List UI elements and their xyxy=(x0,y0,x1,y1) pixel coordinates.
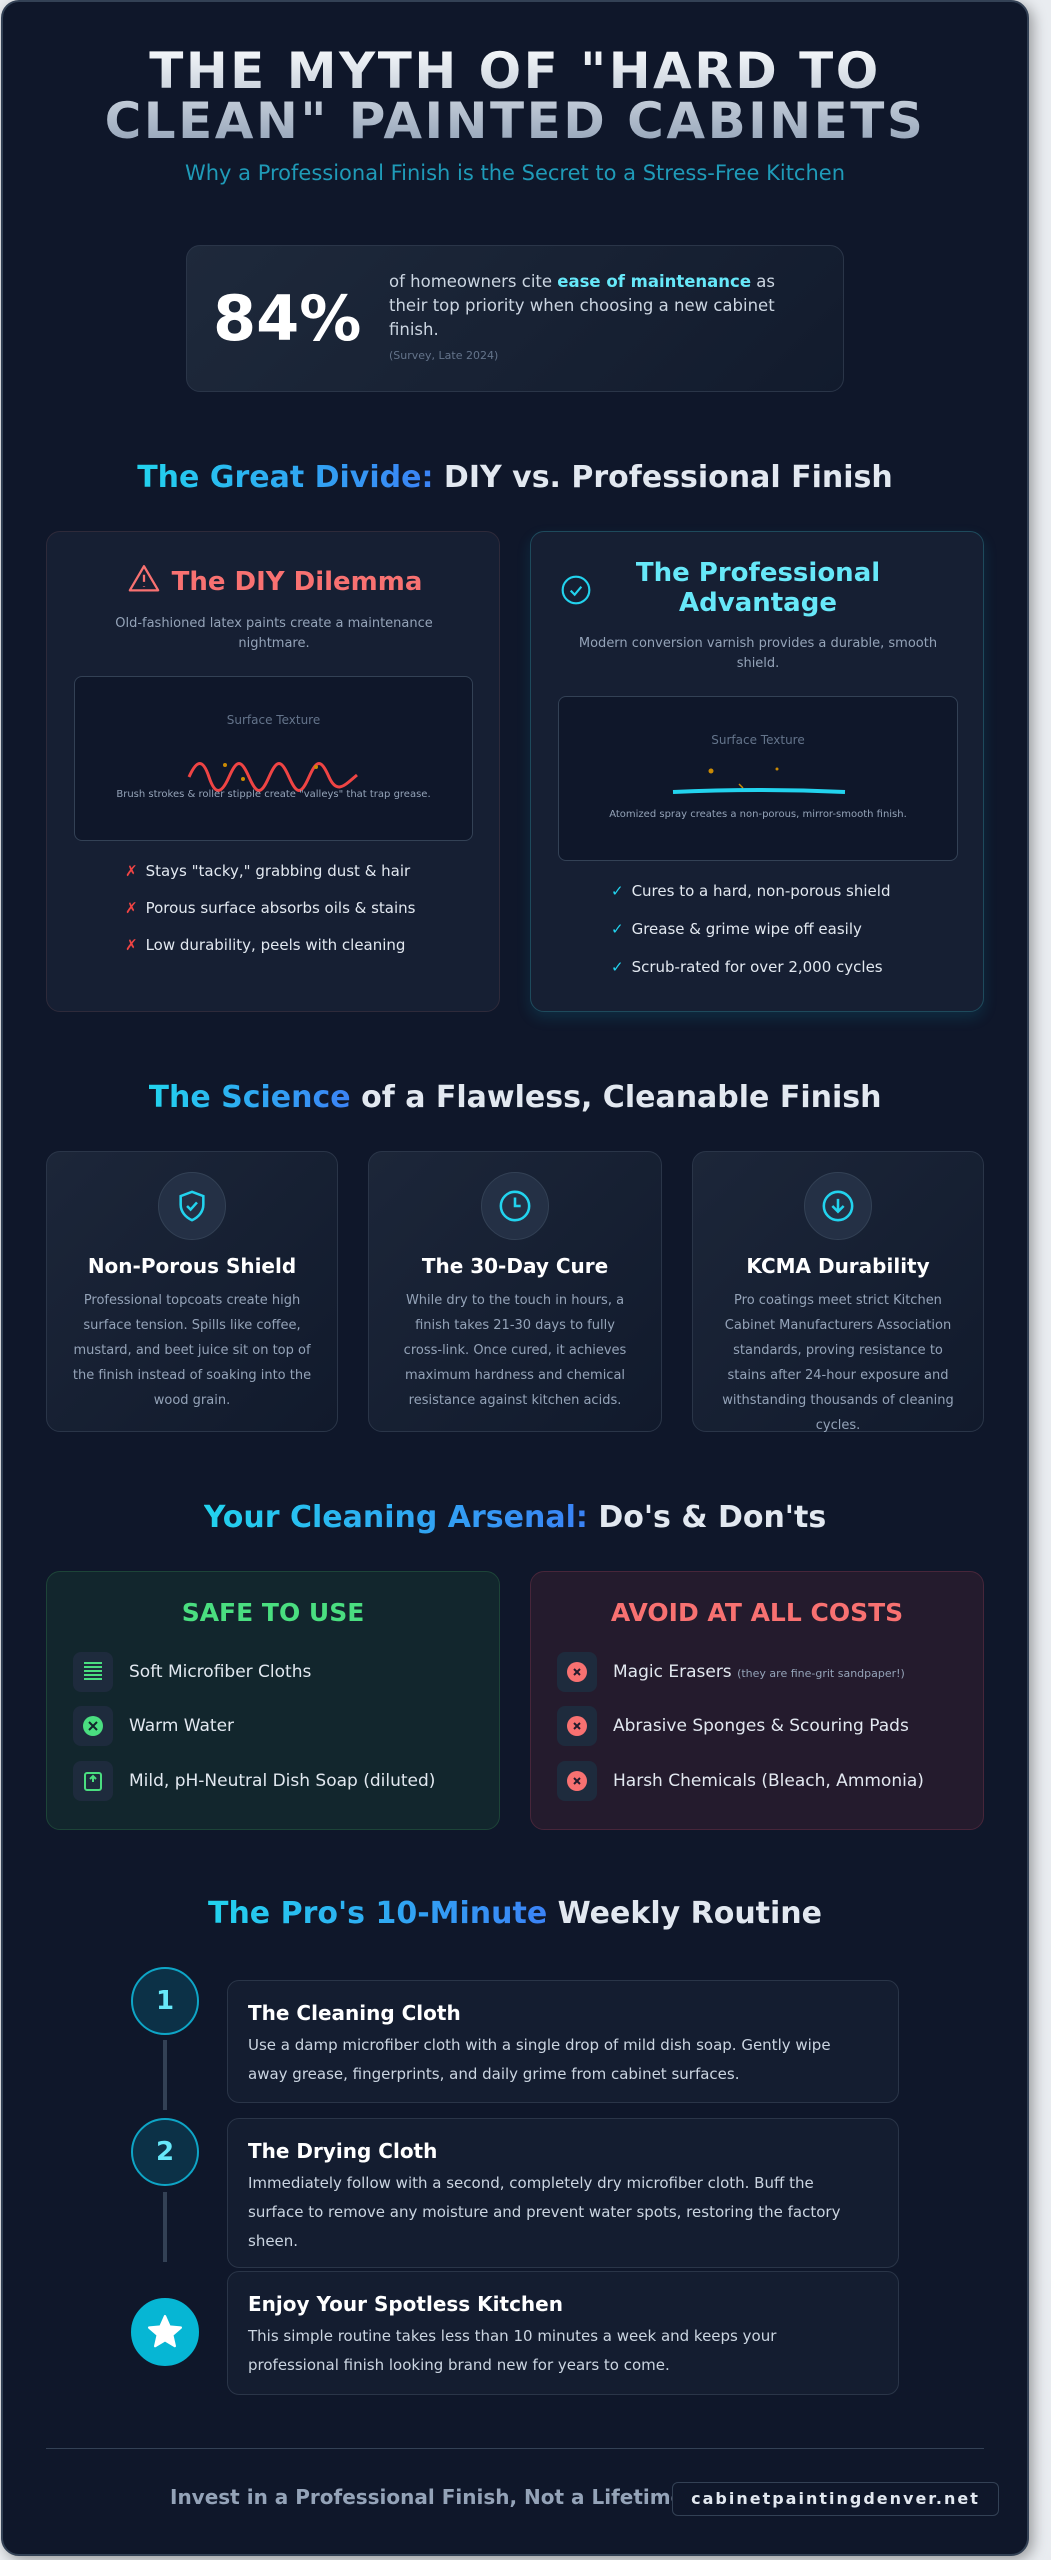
step 3 xyxy=(227,2271,899,2395)
footer tagline: Invest in a Professional Finish, Not a Lifetime of Scrubbing xyxy=(170,2485,835,2509)
step 2 marker xyxy=(131,2118,199,2186)
science card 2 xyxy=(368,1151,662,1432)
science card 2: The 30-Day Cure xyxy=(422,1254,608,1278)
stat text: of homeowners cite ease of maintenance as their top priority when choosing a new cabinet finish. xyxy=(389,272,775,339)
safe item 2 xyxy=(73,1706,234,1746)
DIY list: ✗ Stays "tacky," grabbing dust & hair xyxy=(125,862,410,880)
url badge: cabinetpaintingdenver.net xyxy=(691,2489,980,2508)
avoid item 1 xyxy=(557,1652,905,1692)
subtitle: Why a Professional Finish is the Secret to a Stress-Free Kitchen xyxy=(185,161,845,185)
step 2: The Drying Cloth xyxy=(248,2139,437,2163)
icon: clock xyxy=(481,1172,549,1240)
science card 1: Professional topcoats create high surface tension. Spills like coffee, mustard, and beet juice sit on top of the finish instead of soaking into the wood grain. xyxy=(73,1293,311,1408)
science card 3: stains after 24-hour exposure and withstanding thousands of cleaning cycles. xyxy=(722,1368,954,1433)
stat text: (Survey, Late 2024) xyxy=(389,349,498,362)
pro list: ✓ Scrub-rated for over 2,000 cycles xyxy=(611,958,883,976)
step 3: This simple routine takes less than 10 minutes a week and keeps your professional finish looking brand new for years to come. xyxy=(248,2327,776,2374)
pro icon xyxy=(562,576,590,604)
DIY list: ✗ Porous surface absorbs oils & stains xyxy=(125,899,416,917)
diagram: smooth: Surface Texture xyxy=(711,733,805,747)
science card 1: Non-Porous Shield xyxy=(88,1254,296,1278)
stat number: 84% xyxy=(213,282,361,355)
pro list: ✓ Grease & grime wipe off easily xyxy=(611,920,862,938)
panel: avoid xyxy=(530,1571,984,1830)
title xyxy=(0,46,1030,146)
science card 1 xyxy=(46,1151,338,1432)
diagram: smooth xyxy=(558,696,958,861)
safe heading: SAFE TO USE xyxy=(182,1598,364,1627)
DIY subtitle: Old-fashioned latex paints create a maintenance nightmare. xyxy=(115,616,433,651)
safe item 2: Warm Water xyxy=(129,1716,234,1736)
DIY list: ✗ Low durability, peels with cleaning xyxy=(125,936,405,954)
safe item 3 xyxy=(73,1761,435,1801)
diagram: rough texture: Brush strokes & roller stipple create "valleys" that trap grease. xyxy=(116,789,431,800)
avoid item 3: Harsh Chemicals (Bleach, Ammonia) xyxy=(613,1771,924,1791)
DIY list xyxy=(125,862,416,954)
heading: science: The Science of a Flawless, Cleanable Finish xyxy=(149,1080,881,1115)
step 2: Immediately follow with a second, completely dry microfiber cloth. Buff the surface to remove any moisture and prevent water spots, restoring the factory sheen. xyxy=(248,2174,840,2250)
diagram: rough texture: Surface Texture xyxy=(227,713,320,727)
title: CLEAN" PAINTED CABINETS xyxy=(105,92,925,150)
science card 3: Pro coatings meet strict Kitchen Cabinet Manufacturers Association standards, proving resistance to xyxy=(725,1293,951,1358)
step 3 marker: star xyxy=(131,2298,199,2366)
heading: arsenal: Your Cleaning Arsenal: Do's & Don'ts xyxy=(204,1500,826,1535)
panel: Professional xyxy=(530,531,984,1012)
step 1: Use a damp microfiber cloth with a single drop of mild dish soap. Gently wipe away grease, fingerprints, and daily grime from cabinet surfaces. xyxy=(248,2036,831,2083)
heading: routine: The Pro's 10-Minute Weekly Routine xyxy=(208,1896,822,1931)
pro heading: The Professional Advantage xyxy=(636,558,880,618)
diagram: rough texture xyxy=(74,676,473,841)
science card 3 xyxy=(692,1151,984,1432)
step 2 xyxy=(227,2118,899,2268)
avoid item 2 xyxy=(557,1706,909,1746)
step 3: Enjoy Your Spotless Kitchen xyxy=(248,2292,563,2316)
pro subtitle: Modern conversion varnish provides a durable, smooth shield. xyxy=(579,636,937,671)
step 1 marker: 1 xyxy=(156,1986,174,2016)
science card 3: KCMA Durability xyxy=(746,1254,930,1278)
safe item 1: Soft Microfiber Cloths xyxy=(129,1662,311,1682)
avoid item 3 xyxy=(557,1761,924,1801)
avoid item 1: Magic Erasers (they are fine-grit sandpaper!) xyxy=(613,1662,905,1682)
science card 2: While dry to the touch in hours, a finish takes 21-30 days to fully cross-link. Once cured, it achieves maximum hardness and chemical resistance against kitchen acids. xyxy=(404,1293,626,1408)
safe item 1 xyxy=(73,1652,311,1692)
step 1: The Cleaning Cloth xyxy=(248,2001,461,2025)
avoid item 2: Abrasive Sponges & Scouring Pads xyxy=(613,1716,909,1736)
icon: down arrow xyxy=(804,1172,872,1240)
step 2 marker: 2 xyxy=(156,2137,174,2167)
avoid heading: AVOID AT ALL COSTS xyxy=(611,1598,903,1627)
panel: DIY xyxy=(46,531,500,1012)
safe item 3: Mild, pH-Neutral Dish Soap (diluted) xyxy=(129,1771,435,1791)
title: THE MYTH OF "HARD TO xyxy=(149,42,881,100)
pro list: ✓ Cures to a hard, non-porous shield xyxy=(611,882,890,900)
step 1 marker xyxy=(131,1967,199,2035)
pro list xyxy=(611,882,890,976)
url badge xyxy=(672,2482,999,2516)
diagram: smooth: Atomized spray creates a non-porous, mirror-smooth finish. xyxy=(609,809,907,820)
panel: safe xyxy=(46,1571,500,1830)
stat box xyxy=(186,245,844,392)
heading: great divide: The Great Divide: DIY vs. Professional Finish xyxy=(137,460,893,495)
icon: shield xyxy=(158,1172,226,1240)
step 1 xyxy=(227,1980,899,2103)
DIY heading: The DIY Dilemma xyxy=(172,567,422,597)
